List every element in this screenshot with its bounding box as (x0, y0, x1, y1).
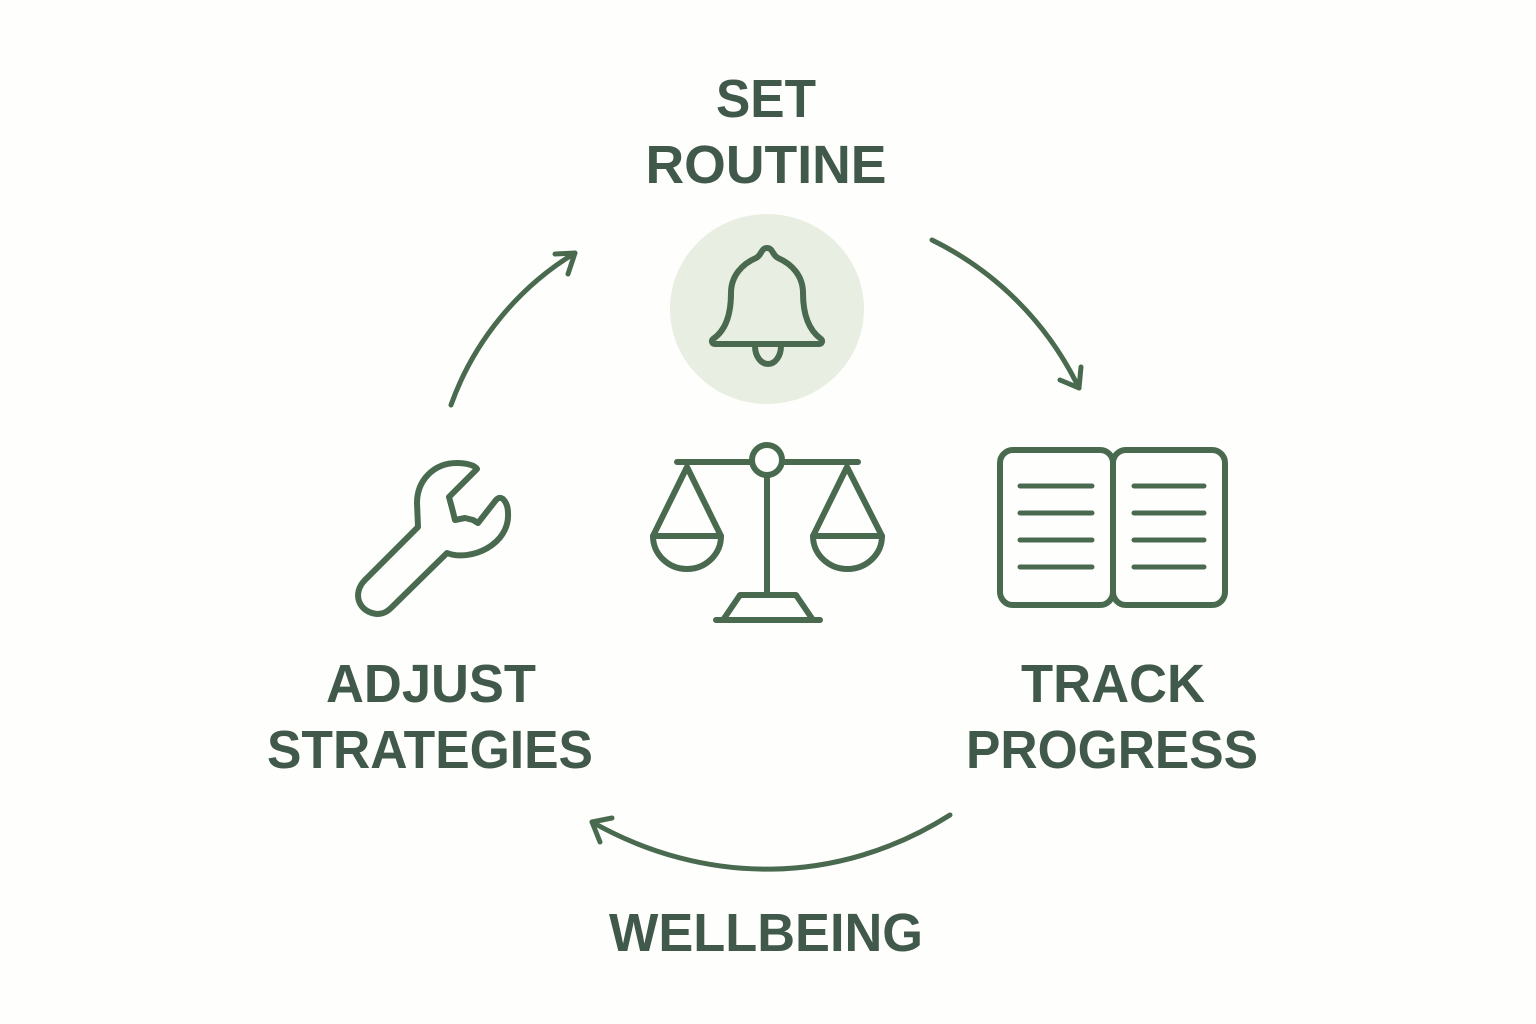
heading: adjust strategies: ADJUST (326, 654, 536, 714)
heading: adjust strategies: STRATEGIES (267, 720, 593, 780)
arrow: routine to track (932, 240, 1081, 388)
heading: set routine: ROUTINE (646, 135, 886, 195)
heading: set routine: SET (716, 69, 816, 129)
arrow: adjust to routine (451, 253, 575, 405)
heading: track progress: TRACK (1021, 654, 1205, 714)
heading: track progress: PROGRESS (966, 720, 1258, 780)
heading: track progress (966, 654, 1258, 780)
arrow: track to adjust (592, 815, 950, 869)
heading: set routine (646, 69, 886, 195)
icon: wrench (358, 463, 508, 614)
icon: open book journal (1000, 450, 1225, 605)
icon: balance scale (653, 445, 882, 620)
icon: bell in circle (670, 214, 864, 404)
heading: adjust strategies (267, 654, 593, 780)
heading: wellbeing: WELLBEING (609, 903, 923, 963)
